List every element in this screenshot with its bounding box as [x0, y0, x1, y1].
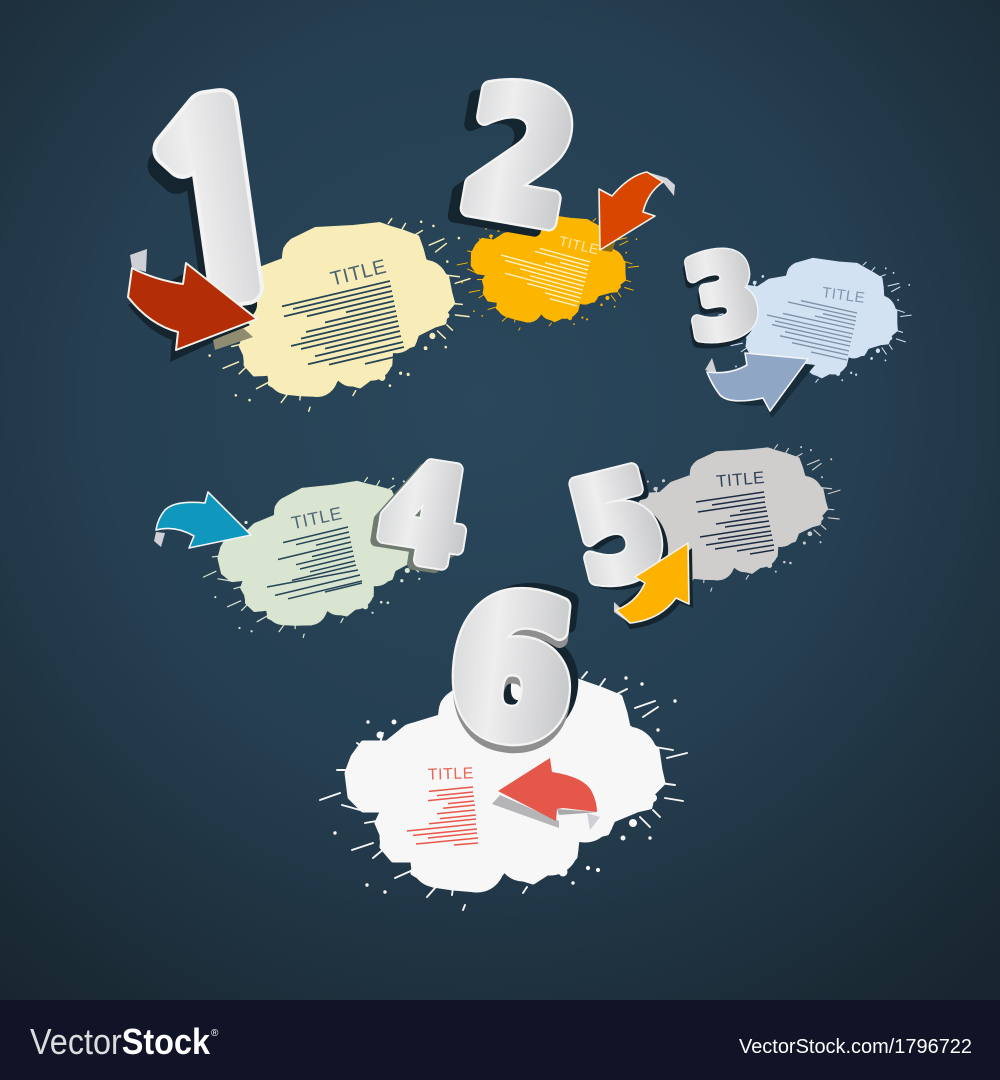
footer bar — [0, 1000, 1000, 1080]
arrow 6 — [492, 758, 600, 830]
digit 2: 2 — [449, 48, 590, 265]
blob 2 — [449, 200, 644, 346]
title 1: TITLE — [328, 256, 389, 291]
blob 4 — [195, 471, 448, 647]
arrow 2 — [599, 172, 675, 252]
digit 5: 5 — [556, 440, 679, 617]
registered mark: ® — [211, 1028, 219, 1039]
digit 5: 5 — [563, 444, 686, 621]
panel: step 5 — [556, 438, 845, 629]
digit 1: 1 — [127, 75, 311, 340]
digit 5: 5 — [556, 440, 679, 617]
text lines 5 — [696, 492, 774, 554]
title 5: TITLE — [715, 468, 766, 491]
digit 6: 6 — [448, 550, 593, 778]
text lines 6 — [407, 787, 478, 845]
text lines 3 — [767, 301, 857, 360]
digit 4: 4 — [370, 433, 479, 597]
blob 3 — [710, 243, 918, 404]
digit 6: 6 — [439, 563, 584, 791]
title 3: TITLE — [821, 284, 866, 307]
image id: VectorStock.com/1796722 — [739, 1036, 972, 1058]
arrow 1 — [128, 249, 257, 362]
digit 2: 2 — [449, 48, 590, 265]
title 4: TITLE — [289, 503, 344, 533]
text lines 1 — [282, 281, 407, 365]
title 6: TITLE — [428, 765, 474, 784]
panel: step 3 — [672, 228, 918, 418]
digit 2: 2 — [435, 56, 576, 272]
digit 4: 4 — [363, 437, 472, 600]
blob 5 — [618, 442, 845, 596]
text lines 4 — [267, 527, 362, 599]
panel: step 6 — [320, 549, 687, 910]
panel: step 4 — [154, 432, 479, 647]
digit 3: 3 — [676, 228, 768, 365]
digit 1: 1 — [121, 91, 305, 356]
blob 6 — [320, 672, 687, 910]
digit 6: 6 — [439, 555, 584, 784]
digit 4: 4 — [370, 433, 479, 597]
arrow 4 — [154, 492, 251, 548]
panel: step 2 — [435, 46, 675, 346]
panel: step 1 — [119, 75, 476, 417]
arrow 5 — [614, 543, 693, 629]
title 2: TITLE — [558, 233, 601, 257]
arrow 3 — [705, 353, 815, 418]
digit 6: 6 — [439, 555, 584, 784]
text lines 2 — [501, 248, 590, 306]
logo: VectorStock: VectorStock — [30, 1021, 211, 1062]
digit 3: 3 — [673, 235, 766, 371]
digit 1: 1 — [127, 75, 311, 340]
digit 3: 3 — [676, 228, 768, 365]
blob 1 — [192, 215, 476, 417]
